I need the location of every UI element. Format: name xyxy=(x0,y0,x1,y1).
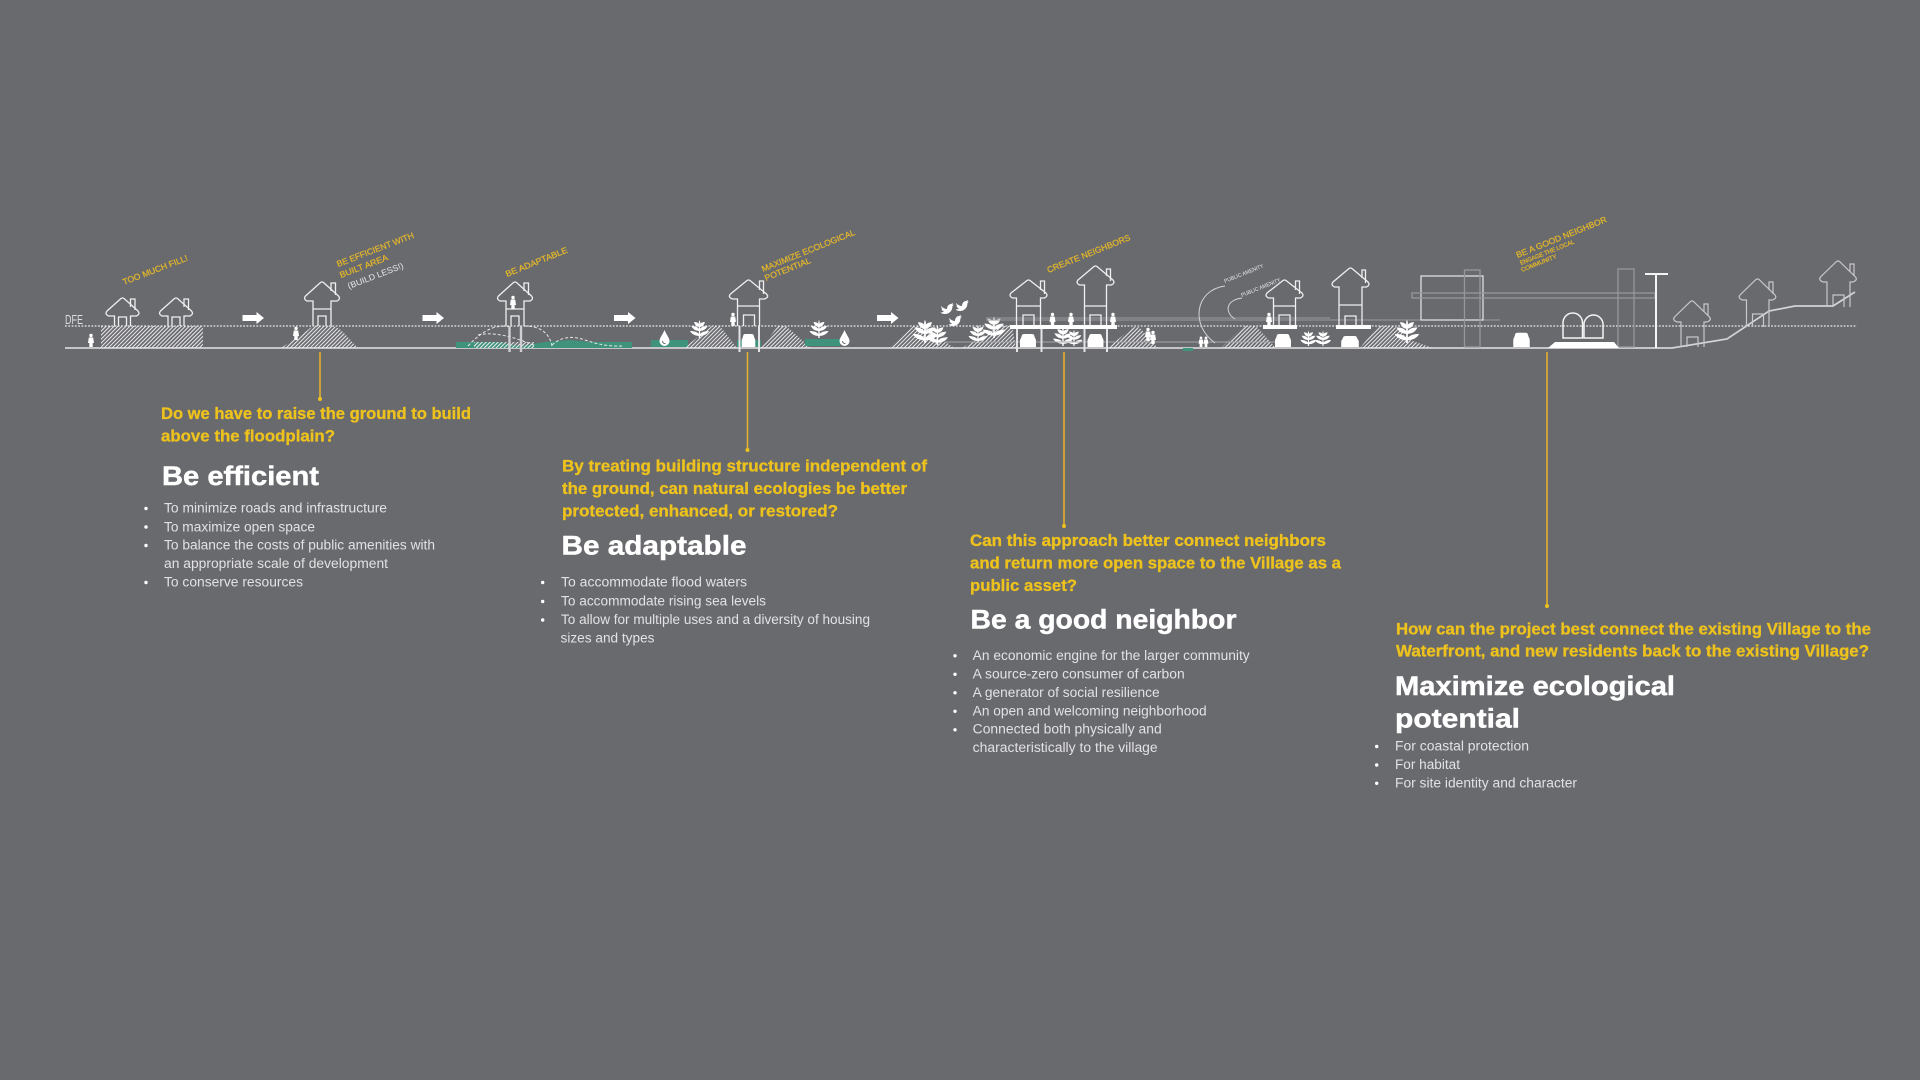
heading: potential xyxy=(1395,704,1520,734)
house, tall xyxy=(1077,266,1114,325)
stage 8: existing village houses xyxy=(1674,261,1856,347)
callout leader 1 xyxy=(318,352,322,401)
car xyxy=(742,334,755,347)
bullet list: characteristically to the village xyxy=(973,740,1158,755)
bullet list: To accommodate rising sea levels xyxy=(561,594,766,608)
tunnel arches xyxy=(1563,313,1603,338)
panel: maximize ecological potential xyxy=(1375,620,1871,790)
panel: be a good neighbor xyxy=(953,532,1342,755)
bullet list: sizes and types xyxy=(560,630,655,646)
column left xyxy=(1464,270,1480,347)
hill left xyxy=(684,326,737,348)
label: CREATE NEIGHBORS xyxy=(1046,232,1132,275)
public amenity labels: PUBLIC AMENITY xyxy=(1224,263,1265,285)
car xyxy=(1513,333,1530,347)
design flood elevation dotted line xyxy=(65,325,1857,327)
house xyxy=(305,282,339,326)
bullet list: To accommodate flood waters xyxy=(561,575,747,590)
question: Waterfront, and new residents back to the existing Village? xyxy=(1396,643,1869,661)
bullet list: an appropriate scale of development xyxy=(164,556,388,571)
wetland right xyxy=(805,339,840,346)
house xyxy=(1674,301,1710,347)
plant xyxy=(690,320,709,338)
column right xyxy=(1618,269,1634,347)
house xyxy=(1010,280,1047,325)
bullet list: To conserve resources xyxy=(164,575,303,590)
bullet list: Connected both physically and xyxy=(973,722,1162,737)
hatch on ground xyxy=(474,342,534,348)
hills xyxy=(889,326,1276,348)
dashed flood curves xyxy=(468,326,622,346)
stilts xyxy=(1017,329,1107,352)
question: above the floodplain? xyxy=(161,428,335,446)
bullet list: To maximize open space xyxy=(164,519,315,534)
stilts xyxy=(740,326,759,352)
arrow xyxy=(614,312,636,324)
droplet xyxy=(840,330,850,346)
deck slabs xyxy=(1263,325,1371,329)
stilts xyxy=(510,326,521,352)
public amenity curves xyxy=(1199,286,1242,343)
bullet list: For habitat xyxy=(1395,757,1460,772)
question: and return more open space to the Village as a xyxy=(970,554,1342,572)
ground line xyxy=(65,292,1855,348)
cars xyxy=(1020,334,1104,347)
heading: Be efficient xyxy=(162,461,319,491)
hill right xyxy=(761,326,811,348)
stage 2: be efficient xyxy=(281,230,415,348)
secondary lower line xyxy=(945,341,1280,343)
callout leader 3 xyxy=(1062,352,1066,528)
house on stilts xyxy=(498,282,532,326)
question xyxy=(161,405,471,446)
question xyxy=(562,458,928,521)
birds xyxy=(940,300,969,326)
person xyxy=(88,334,94,347)
label: MAXIMIZE ECOLOGICAL xyxy=(760,227,857,274)
label: TOO MUCH FILL! xyxy=(121,253,189,287)
panel: be adaptable xyxy=(541,458,928,646)
bullet list xyxy=(953,648,1250,755)
arrow xyxy=(242,312,264,324)
droplet xyxy=(660,330,670,346)
plants xyxy=(1300,331,1331,346)
bullet list: To balance the costs of public amenities with xyxy=(164,538,435,552)
heading: Be a good neighbor xyxy=(970,604,1236,634)
person xyxy=(1266,313,1272,326)
bullet list: An economic engine for the larger community xyxy=(973,648,1250,663)
callout leader 4 xyxy=(1545,352,1549,608)
person xyxy=(730,313,736,326)
overhead band xyxy=(1412,293,1655,298)
stage 7: waterfront connection xyxy=(1412,214,1668,348)
hill xyxy=(281,326,358,348)
question xyxy=(970,532,1342,595)
house xyxy=(106,298,139,326)
bullet list: For site identity and character xyxy=(1395,775,1578,790)
utility pole xyxy=(1645,274,1668,348)
stage 3: be adaptable xyxy=(456,245,632,352)
question: Do we have to raise the ground to build xyxy=(161,405,471,423)
person xyxy=(293,327,299,340)
label: POTENTIAL xyxy=(763,255,812,283)
heading: Be adaptable xyxy=(562,530,746,560)
label xyxy=(335,230,415,291)
label: ENGAGE THE LOCAL xyxy=(1520,239,1576,267)
question: How can the project best connect the existing Village to the xyxy=(1396,620,1871,638)
plants xyxy=(913,316,1083,346)
tunnel base xyxy=(1548,342,1619,348)
public amenity labels: PUBLIC AMENITY xyxy=(1241,277,1282,299)
house xyxy=(1820,261,1856,307)
house xyxy=(1739,279,1776,327)
bullet list: To allow for multiple uses and a diversity of housing xyxy=(561,612,870,627)
person xyxy=(510,296,516,309)
heading: Maximize ecological xyxy=(1395,671,1675,701)
heading xyxy=(1395,671,1675,734)
section diagram xyxy=(65,214,1857,352)
label: BE A GOOD NEIGHBOR xyxy=(1515,214,1608,260)
label: BUILT AREA xyxy=(338,252,390,280)
question: By treating building structure independent of xyxy=(562,458,928,476)
house xyxy=(1266,280,1303,325)
bullet list: To minimize roads and infrastructure xyxy=(164,501,387,516)
public amenity labels xyxy=(1224,263,1282,299)
house on stilts xyxy=(729,280,768,326)
arrow xyxy=(422,312,444,324)
question: protected, enhanced, or restored? xyxy=(562,503,838,521)
cars xyxy=(1275,334,1359,347)
bullet list xyxy=(1375,739,1578,790)
people xyxy=(1050,313,1208,347)
stage 4: maximize ecological potential xyxy=(651,227,857,352)
wetland xyxy=(456,340,632,348)
question: the ground, can natural ecologies be better xyxy=(562,480,908,498)
wetland xyxy=(1183,348,1193,351)
label: COMMUNITY xyxy=(1521,254,1558,274)
question xyxy=(1396,620,1871,661)
raised walkway band xyxy=(986,318,1500,320)
bullet list xyxy=(541,575,870,646)
callout leader 2 xyxy=(746,352,750,452)
label: (BUILD LESS!) xyxy=(346,260,405,291)
house xyxy=(160,298,192,326)
plant xyxy=(810,320,828,338)
wetland left xyxy=(651,340,688,347)
question: public asset? xyxy=(970,577,1077,595)
question: Can this approach better connect neighbors xyxy=(970,532,1326,550)
bullet list: For coastal protection xyxy=(1395,739,1529,754)
deck slab xyxy=(1010,325,1117,329)
label: BE ADAPTABLE xyxy=(504,245,569,279)
stage 6: public amenity housing xyxy=(1199,263,1433,348)
bullet list: A generator of social resilience xyxy=(973,685,1160,700)
hill xyxy=(1360,326,1433,348)
wetland under house xyxy=(737,340,761,347)
fill block xyxy=(101,326,203,348)
house xyxy=(1332,268,1369,326)
stage 1: too much fill xyxy=(88,253,203,348)
DFE label: DFE xyxy=(65,313,83,327)
bullet list: A source-zero consumer of carbon xyxy=(973,666,1185,682)
label: BE EFFICIENT WITH xyxy=(335,230,415,269)
stage 5: create neighbors xyxy=(889,232,1500,352)
panel: be efficient xyxy=(144,405,471,590)
bullet list xyxy=(144,501,435,590)
building outline xyxy=(1421,276,1483,320)
arrow xyxy=(877,312,898,324)
bullet list: An open and welcoming neighborhood xyxy=(973,703,1207,718)
plant xyxy=(1395,320,1419,343)
